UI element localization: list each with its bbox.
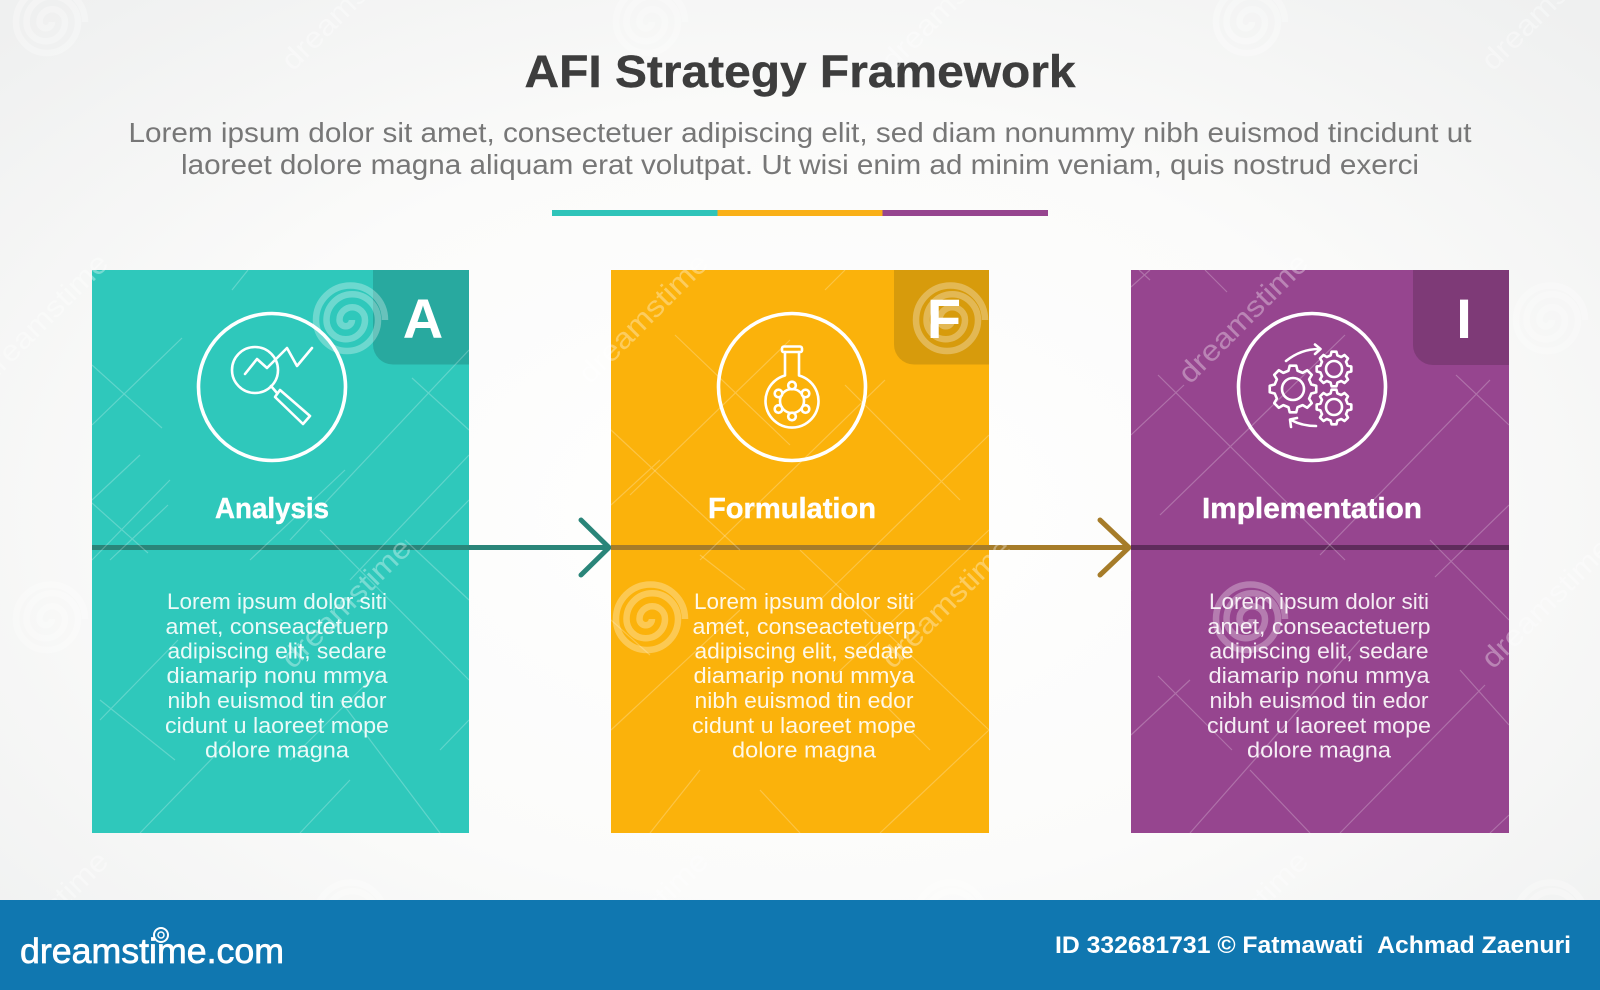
watermark: diagonal text: dreamstime bbox=[875, 532, 1018, 675]
subtitle text: Lorem ipsum dolor sit amet, consectetuer adipiscing elit, sed diam nonummy nibh euismod tincidunt ut bbox=[128, 117, 1472, 148]
card background: Formulation bbox=[611, 270, 989, 833]
body text: Analysis: adipiscing elit, sedare bbox=[168, 638, 386, 664]
letter tab: A: A bbox=[403, 287, 443, 350]
body text: Analysis: diamarip nonu mmya bbox=[166, 663, 388, 688]
watermark: diagonal text: dreamstime bbox=[1172, 845, 1315, 988]
footer bar bbox=[0, 900, 1600, 990]
arrow: Formulation to Implementation bbox=[611, 520, 1129, 575]
body text: Implementation bbox=[1207, 589, 1431, 762]
footer logo: dreamstime.com: dreamstime.com bbox=[20, 932, 284, 971]
body text: Formulation: diamarip nonu mmya bbox=[694, 663, 915, 688]
watermark: diagonal text: dreamstime bbox=[572, 845, 715, 988]
body text: Implementation: nibh euismod tin edor bbox=[1210, 688, 1429, 713]
letter tab: F bbox=[894, 270, 989, 364]
panel: Implementation bbox=[1131, 270, 1509, 833]
panel: Analysis bbox=[92, 270, 469, 833]
body text: Formulation: dolore magna bbox=[732, 738, 877, 762]
icon: gears with cycle arrows bbox=[1238, 314, 1386, 460]
letter tab: A bbox=[373, 270, 469, 364]
body text: Formulation: Lorem ipsum dolor siti bbox=[694, 589, 914, 614]
watermark: diagonal text: dreamstime bbox=[275, 532, 418, 675]
body text: Implementation: dolore magna bbox=[1247, 738, 1392, 762]
title: AFI Strategy Framework bbox=[524, 46, 1077, 97]
body text: Implementation: adipiscing elit, sedare bbox=[1210, 638, 1428, 664]
body text: Analysis: nibh euismod tin edor bbox=[168, 688, 387, 713]
card background: Analysis bbox=[92, 270, 469, 833]
panel: Formulation bbox=[611, 270, 989, 833]
tricolor divider bar bbox=[552, 210, 1048, 216]
body text: Implementation: Lorem ipsum dolor siti bbox=[1209, 589, 1429, 614]
subtitle text bbox=[128, 117, 1472, 180]
body text: Formulation: amet, conseactetuerp bbox=[692, 614, 916, 639]
watermark: diagonal text: dreamstime bbox=[572, 247, 715, 390]
body text: Analysis: amet, conseactetuerp bbox=[166, 614, 388, 639]
arrow: Analysis to Formulation bbox=[92, 520, 609, 575]
body text: Analysis bbox=[165, 589, 389, 762]
body text: Analysis: cidunt u laoreet mope bbox=[165, 713, 389, 738]
letter tab: I: I bbox=[1456, 287, 1472, 350]
icon: magnifier over chart bbox=[198, 314, 346, 460]
watermark: crossing lines bbox=[92, 270, 1509, 833]
body text: Analysis: Lorem ipsum dolor siti bbox=[167, 589, 387, 614]
body text: Formulation: cidunt u laoreet mope bbox=[692, 713, 916, 738]
body text: Implementation: cidunt u laoreet mope bbox=[1207, 713, 1431, 738]
body text: Formulation: nibh euismod tin edor bbox=[694, 688, 914, 713]
body text: Implementation: diamarip nonu mmya bbox=[1208, 663, 1430, 688]
body text: Formulation: adipiscing elit, sedare bbox=[694, 638, 914, 664]
footer credit text: ID 332681731 © Fatmawati Achmad Zaenuri bbox=[1055, 932, 1571, 959]
icon: flask with molecule bbox=[718, 314, 866, 460]
body text: Implementation: amet, conseactetuerp bbox=[1208, 614, 1430, 639]
subtitle text: laoreet dolore magna aliquam erat volutpat. Ut wisi enim ad minim veniam, quis nostrud exerci bbox=[181, 149, 1419, 180]
card background: Implementation bbox=[1131, 270, 1509, 833]
heading: Implementation: Implementation bbox=[1202, 493, 1422, 525]
connector line across Implementation bbox=[1131, 545, 1509, 550]
letter tab: F: F bbox=[927, 287, 961, 350]
heading: Analysis: Analysis bbox=[215, 493, 329, 525]
letter tab: I bbox=[1413, 270, 1509, 365]
heading: Formulation: Formulation bbox=[708, 493, 876, 525]
watermark: diagonal text: dreamstime bbox=[1172, 247, 1315, 390]
body text: Analysis: dolore magna bbox=[205, 738, 350, 762]
body text: Formulation bbox=[692, 589, 916, 762]
